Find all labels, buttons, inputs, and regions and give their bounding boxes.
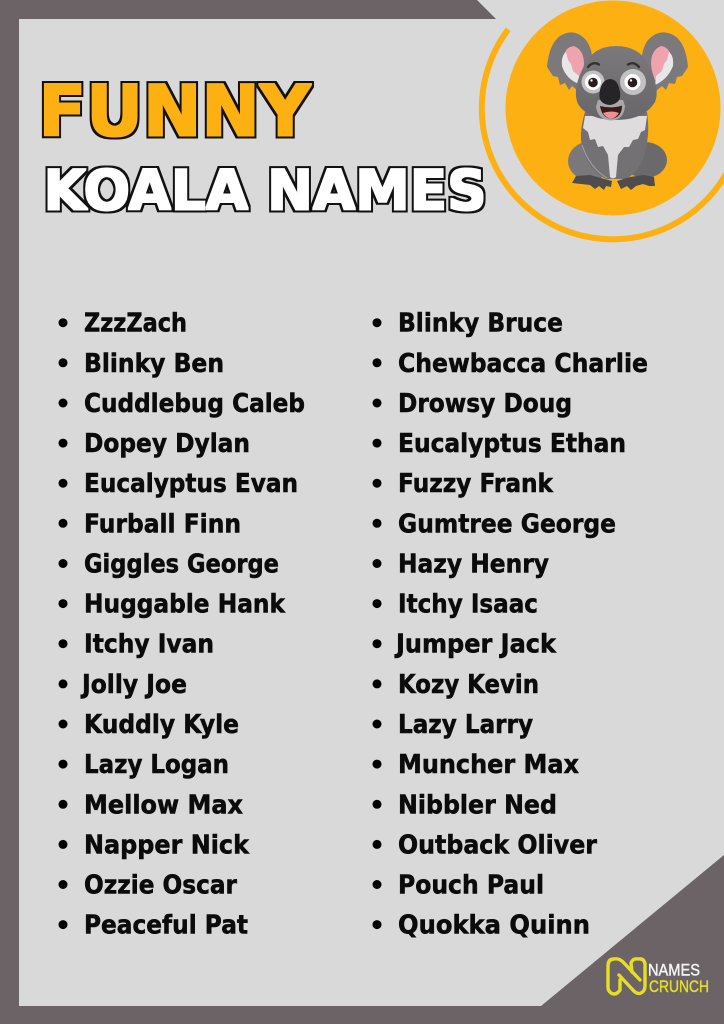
koala head <box>576 46 657 120</box>
name list: left column <box>58 309 305 941</box>
item: Itchy Isaac <box>398 590 538 620</box>
koala muzzle <box>596 100 625 120</box>
item: Itchy Ivan <box>84 630 214 660</box>
item: Kuddly Kyle <box>84 710 239 740</box>
item: Jolly Joe <box>80 670 187 700</box>
koala eyebrows <box>588 63 639 67</box>
item: Blinky Ben <box>84 349 224 379</box>
item: Muncher Max <box>398 750 579 780</box>
item: Lazy Larry <box>398 710 533 740</box>
item: Kozy Kevin <box>398 670 539 700</box>
koala left eye <box>582 70 604 94</box>
orange ring arc <box>482 29 724 239</box>
item: Ozzie Oscar <box>84 870 237 900</box>
item: Eucalyptus Ethan <box>398 429 626 459</box>
item: Blinky Bruce <box>398 309 563 339</box>
item: Outback Oliver <box>398 830 597 860</box>
item: Huggable Hank <box>84 590 286 620</box>
logo: Names Crunch <box>608 959 709 996</box>
logo icon <box>608 959 645 994</box>
item: Gumtree George <box>398 509 616 539</box>
item: Jumper Jack <box>394 630 557 660</box>
koala nose <box>599 79 620 105</box>
item: Pouch Paul <box>398 870 544 900</box>
title: Funny: FUNNY <box>38 70 312 152</box>
item: Hazy Henry <box>398 550 549 580</box>
logo word: Names: NAMES <box>648 962 700 980</box>
item: Drowsy Doug <box>398 389 572 419</box>
item: Nibbler Ned <box>398 790 557 820</box>
item: Mellow Max <box>84 790 243 820</box>
item: Chewbacca Charlie <box>398 349 648 379</box>
orange circle <box>506 0 720 216</box>
title: Koala Names: KOALA NAMES <box>44 158 486 222</box>
item: Furball Finn <box>84 509 241 539</box>
icon: koala <box>547 32 688 190</box>
item: Cuddlebug Caleb <box>84 389 305 419</box>
koala right eye <box>620 69 646 95</box>
item: Fuzzy Frank <box>398 469 554 499</box>
item: ZzzZach <box>84 309 187 339</box>
koala feet <box>572 175 655 190</box>
item: Dopey Dylan <box>84 429 250 459</box>
name list: right column <box>372 309 648 941</box>
item: Quokka Quinn <box>398 911 590 941</box>
item: Eucalyptus Evan <box>84 469 298 499</box>
koala mouth <box>600 106 622 118</box>
item: Giggles George <box>84 550 279 580</box>
koala right ear <box>642 32 688 91</box>
item: Lazy Logan <box>84 750 229 780</box>
logo word: Crunch: CRUNCH <box>649 978 709 996</box>
item: Peaceful Pat <box>84 911 248 941</box>
item: Napper Nick <box>84 830 250 860</box>
koala left ear <box>547 32 592 91</box>
koala body <box>568 112 667 180</box>
